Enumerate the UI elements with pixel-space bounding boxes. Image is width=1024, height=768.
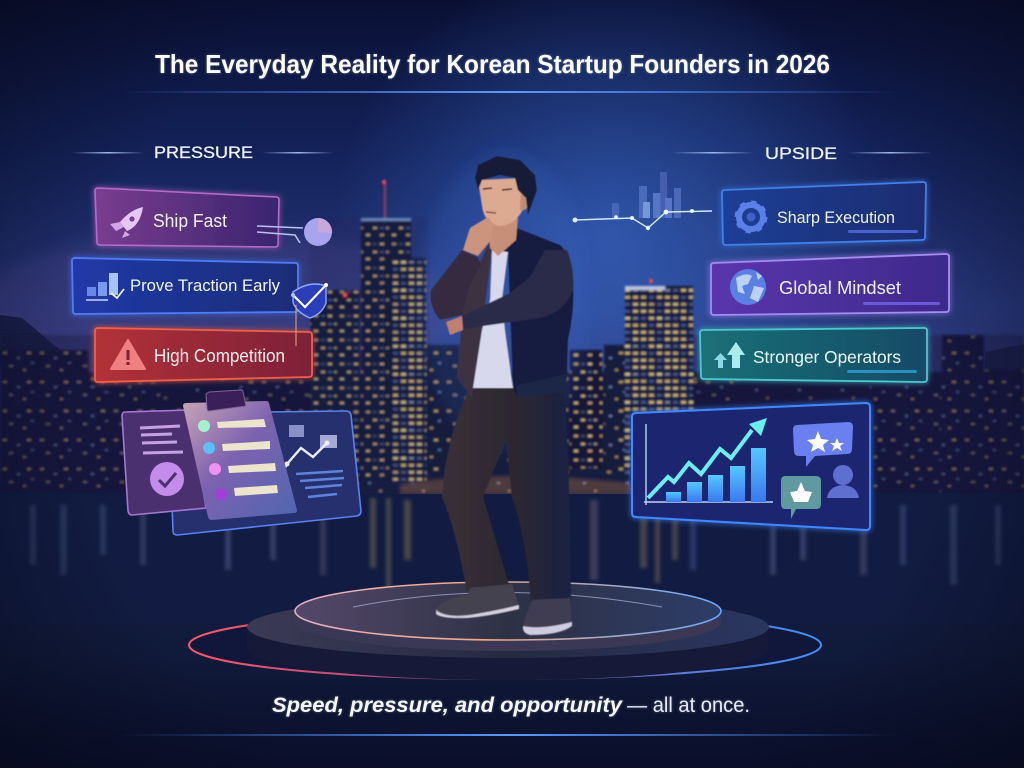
founder figure [420,150,590,635]
icon: arrows up [714,342,745,368]
icon: person [827,465,859,498]
head and hair [475,156,537,226]
title: The Everyday Reality for Korean Startup Founders in 2026 [155,49,830,79]
card: global mindset: Global Mindset [779,278,901,298]
right shoe [523,598,572,635]
icon: warning triangle [111,340,145,369]
card: stronger operators: Stronger Operators [753,347,901,367]
card: ship fast: Ship Fast [153,211,227,231]
card: prove traction early: Prove Traction Early [130,276,280,295]
shirt [473,250,513,388]
hand at elbow [446,316,463,335]
floor ring [189,611,821,679]
city skyline [0,180,1024,495]
icon: shield check [291,283,328,318]
jacket body [457,226,573,398]
card: high competition [95,305,312,382]
caption: — all at once. [627,694,750,717]
panel: blue report [172,411,361,535]
heading: pressure: PRESSURE [154,143,253,162]
icon: rocket [110,207,143,238]
panel: purple checklist [122,410,206,515]
icon: rating bubble [781,476,821,519]
hand on chin [463,217,494,256]
card: ship fast [95,188,332,247]
arm raised to chin [430,250,481,320]
card: sharp execution [722,182,926,245]
chart: floating mini bars and line [572,172,712,230]
icon: pie chart [304,218,332,246]
chart: floating growth panel [632,403,870,530]
trousers [442,388,571,604]
river reflections [0,494,1024,624]
card: high competition: High Competition [154,346,285,366]
card: stronger operators [700,328,927,382]
card: prove traction early [72,258,298,314]
caption: Speed, pressure, and opportunity [272,694,623,717]
panel: clipboard [183,390,297,520]
neck [488,218,518,256]
card: global mindset [711,254,949,315]
icon: bars and check [86,273,124,300]
left shoe [436,584,519,618]
card: sharp execution: Sharp Execution [777,208,895,227]
icon: gear [737,203,765,231]
heading: upside: UPSIDE [765,144,837,163]
bottom rule [120,734,900,736]
icon: globe [730,269,766,305]
illustration: planning clipboard [122,390,361,535]
icon: speech bubble with stars [793,422,853,467]
platform [247,582,769,680]
arm folded across [462,250,573,329]
